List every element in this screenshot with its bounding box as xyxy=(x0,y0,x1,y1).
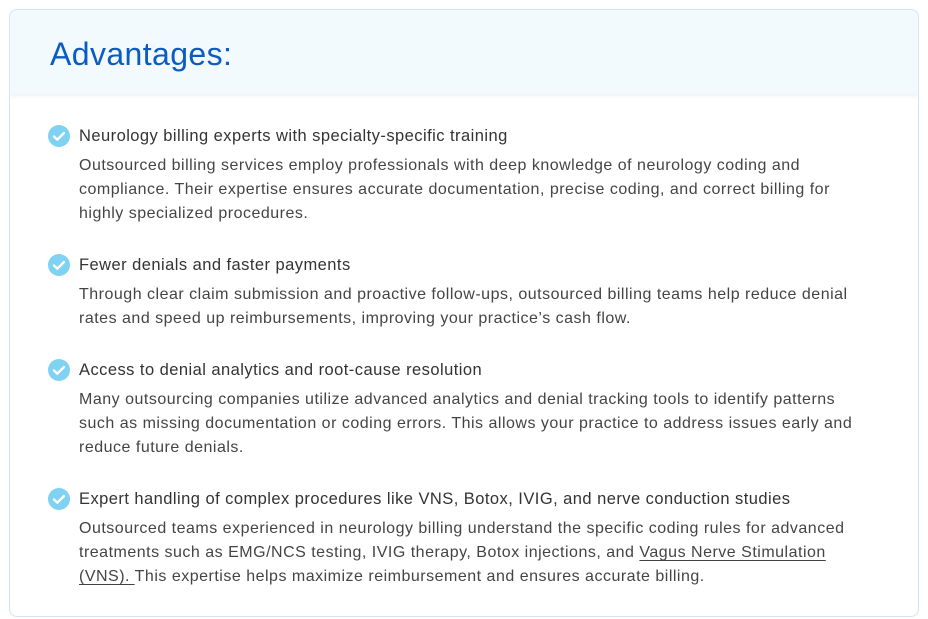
heading: Access to denial analytics and root-cause resolution xyxy=(79,361,482,379)
body text xyxy=(79,286,848,327)
body text: Through clear claim submission and proactive follow-ups, outsourced billing teams help reduce denial xyxy=(79,286,848,303)
item 1 xyxy=(48,125,830,222)
body text xyxy=(79,157,830,222)
body text xyxy=(79,391,852,456)
body text: Outsourced billing services employ professionals with deep knowledge of neurology coding and xyxy=(79,157,800,174)
title: Advantages: xyxy=(50,36,232,72)
body text: rates and speed up reimbursements, improving your practice’s cash flow. xyxy=(79,310,631,327)
icon: check xyxy=(48,488,70,510)
icon: check xyxy=(48,125,70,147)
body text xyxy=(79,520,844,585)
icon: check xyxy=(48,254,70,276)
item 2 xyxy=(48,254,848,327)
body text: highly specialized procedures. xyxy=(79,205,308,222)
body text: such as missing documentation or coding errors. This allows your practice to address issues early and xyxy=(79,415,852,432)
heading: Expert handling of complex procedures like VNS, Botox, IVIG, and nerve conduction studies xyxy=(79,490,790,508)
body text: Many outsourcing companies utilize advanced analytics and denial tracking tools to identify patterns xyxy=(79,391,835,408)
header band xyxy=(10,10,918,94)
body text: Outsourced teams experienced in neurology billing understand the specific coding rules for advanced xyxy=(79,520,844,537)
heading: Fewer denials and faster payments xyxy=(79,256,351,274)
body text: treatments such as EMG/NCS testing, IVIG therapy, Botox injections, and Vagus Nerve Stimulation xyxy=(79,544,826,561)
icon: check xyxy=(48,359,70,381)
item 3 xyxy=(48,359,852,456)
body text: compliance. Their expertise ensures accurate documentation, precise coding, and correct billing for xyxy=(79,181,830,198)
body text: (VNS). This expertise helps maximize reimbursement and ensures accurate billing. xyxy=(79,568,705,585)
body text: reduce future denials. xyxy=(79,439,244,456)
heading: Neurology billing experts with specialty-specific training xyxy=(79,127,508,145)
item 4 xyxy=(48,488,844,585)
